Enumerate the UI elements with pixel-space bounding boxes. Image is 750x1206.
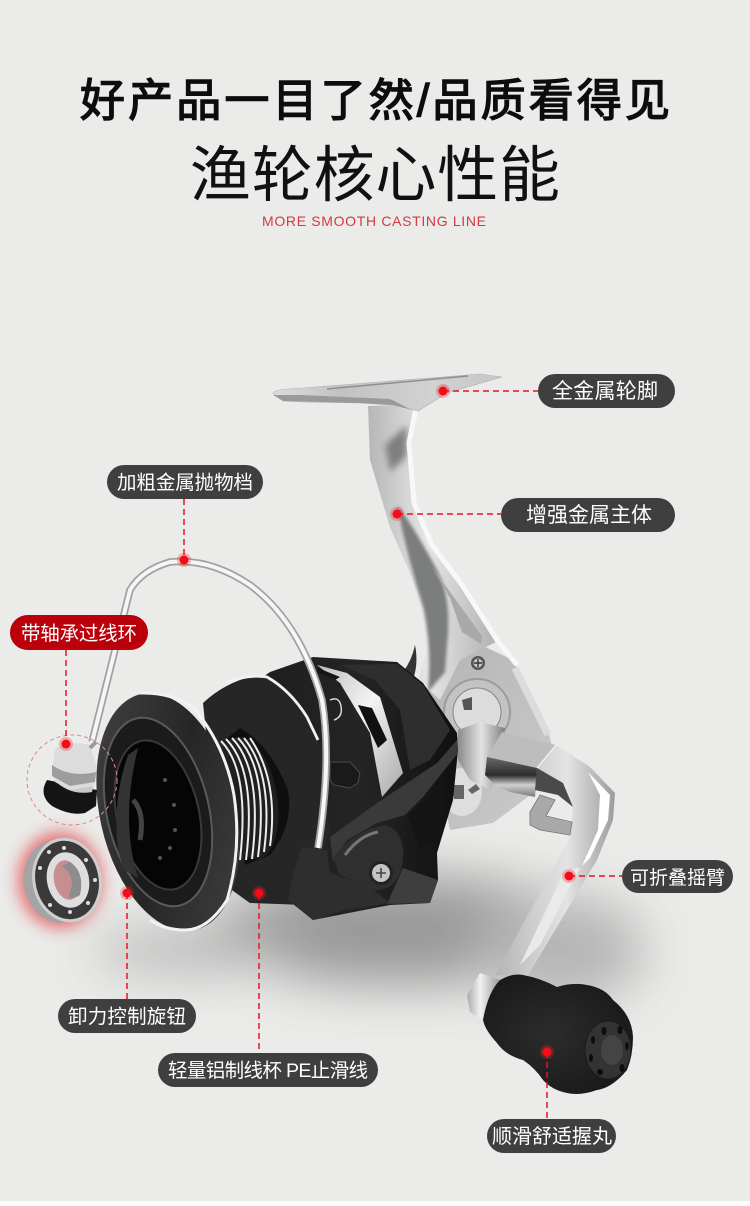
handle pin	[530, 795, 572, 835]
callout: drag control knob	[58, 886, 196, 1033]
callout: folding handle arm: 可折叠摇臂	[630, 867, 725, 889]
bail arm wire	[92, 561, 326, 848]
metal body stem	[368, 403, 553, 830]
callout: reinforced metal body	[390, 498, 675, 532]
bail holder	[288, 847, 390, 920]
handle chrome joint	[458, 722, 573, 807]
bolt	[369, 861, 393, 885]
callout: aluminum spool: 轻量铝制线杯 PE止滑线	[168, 1060, 368, 1082]
handle arm	[495, 745, 615, 977]
illustration: spinning fishing reel	[16, 374, 633, 1094]
callout: reinforced metal body: 增强金属主体	[526, 504, 652, 527]
callout: full metal foot	[436, 374, 675, 408]
front spool flange	[75, 679, 261, 945]
callout: smooth comfortable knob	[487, 1045, 616, 1153]
handle ferrule	[467, 973, 500, 1020]
callout: bearing line roller (red): 带轴承过线环	[21, 623, 137, 645]
callout: folding handle arm	[562, 860, 733, 893]
callout: aluminum spool	[158, 886, 378, 1087]
product shadow	[90, 875, 645, 1005]
callout: smooth comfortable knob: 顺滑舒适握丸	[492, 1125, 612, 1148]
screw	[471, 656, 485, 670]
title: main headline: 好产品一目了然/品质看得见	[80, 75, 670, 126]
bearing with red glow	[16, 832, 108, 929]
handle knob	[483, 975, 633, 1094]
callout: thick metal bail: 加粗金属抛物档	[117, 472, 253, 494]
gear plate	[442, 679, 510, 816]
callout: full metal foot: 全金属轮脚	[552, 380, 658, 403]
callout: bearing line roller (red)	[10, 615, 148, 751]
line spool	[207, 732, 287, 864]
rotor body	[220, 657, 458, 920]
rear flange	[203, 675, 330, 905]
line roller detail	[27, 735, 117, 825]
callout: thick metal bail	[107, 465, 263, 567]
title: sub headline: 渔轮核心性能	[190, 141, 560, 209]
reel foot	[273, 374, 502, 411]
title: english tagline: MORE SMOOTH CASTING LINE	[262, 213, 486, 229]
callout: drag control knob: 卸力控制旋钮	[68, 1006, 186, 1028]
